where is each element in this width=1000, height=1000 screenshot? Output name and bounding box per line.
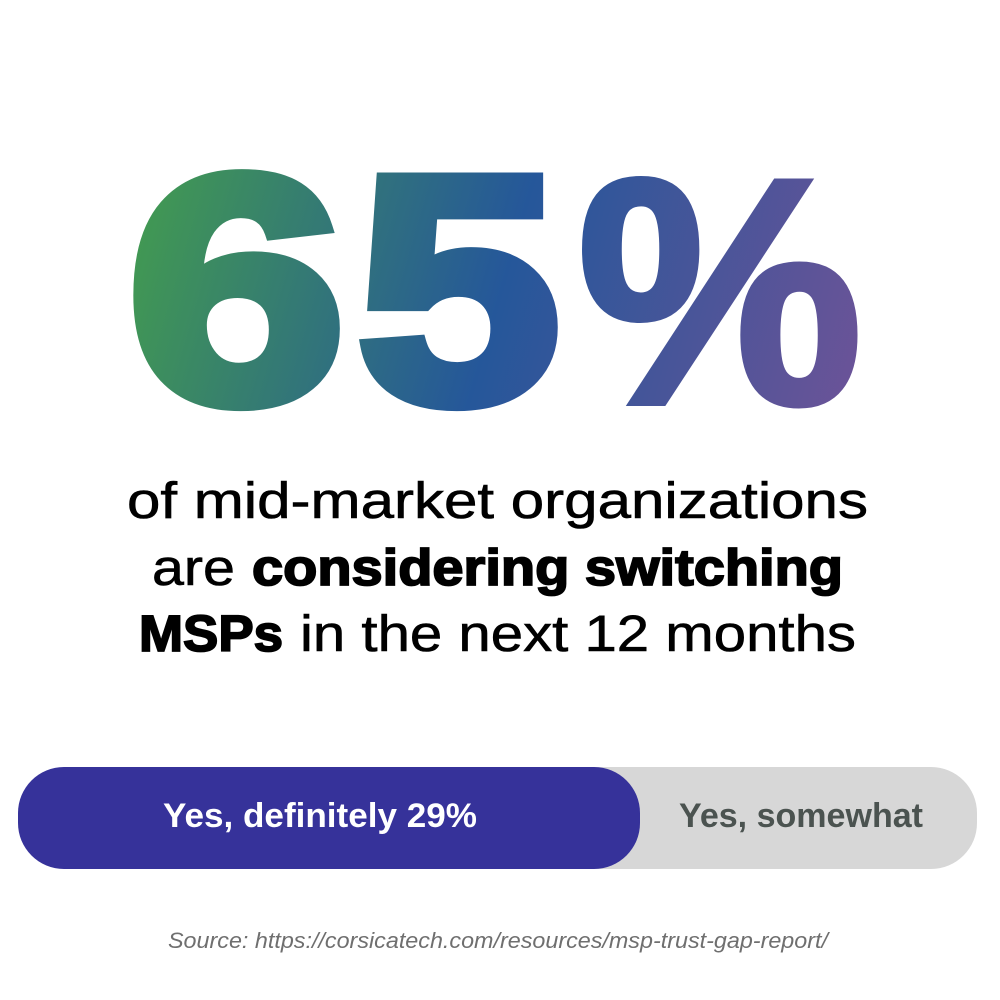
source line: Source: https://corsicatech.com/resources/msp-trust-gap-report/ [168, 928, 830, 953]
description text: MSPs [139, 605, 283, 662]
description text: are [152, 539, 235, 596]
headline statistic: 65% [128, 111, 863, 472]
bar segment: Yes, somewhat [500, 767, 977, 869]
description text: considering switching [252, 539, 843, 596]
headline statistic: 65%: % [577, 113, 863, 472]
headline statistic: 65%: 6 [128, 111, 346, 470]
bar segment: Yes, somewhat: Yes, somewhat [679, 797, 923, 835]
stacked bar [18, 767, 977, 869]
description text: in the next 12 months [300, 605, 856, 662]
description text: of mid-market organizations [127, 472, 868, 529]
description text [127, 472, 868, 662]
bar segment: Yes, definitely 29% [18, 767, 640, 869]
bar segment: Yes, definitely 29%: Yes, definitely 29% [163, 797, 477, 835]
headline statistic: 65%: 5 [357, 111, 560, 470]
